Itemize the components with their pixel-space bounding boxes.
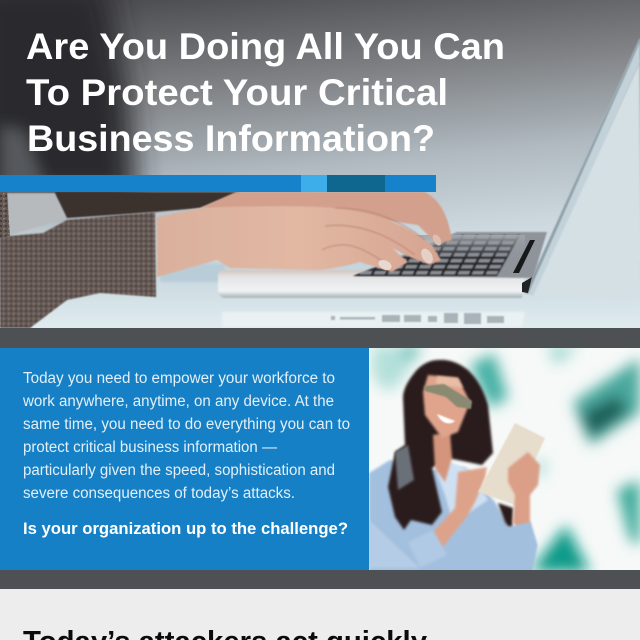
arm and hand [433,467,487,548]
dark divider band top [0,328,640,348]
hair [388,360,493,530]
jacket sleeve [0,212,156,328]
intro paragraph: Today you need to empower your workforce to [23,370,335,387]
blue accent bar [0,175,436,192]
title: To Protect Your Critical [26,72,448,113]
lower hair right [498,503,513,532]
finger creases [322,208,425,268]
intro paragraph [22,370,350,502]
main hand [157,206,441,277]
upper hand [200,192,452,244]
intro paragraph: particularly given the speed, sophistication and [23,462,335,479]
laptop base [218,270,526,298]
shirt [369,460,537,572]
title: Are You Doing All You Can [26,26,505,67]
right hand [508,452,540,535]
intro paragraph: protect critical business information — [23,439,278,456]
hero photo: hands typing on laptop [0,0,640,328]
title [26,26,505,159]
panel: intro text [0,348,369,570]
tablet [478,423,545,505]
face [423,375,470,438]
intro paragraph: severe consequences of today’s attacks. [23,485,295,502]
intro paragraph: work anywhere, anytime, on any device. At the [22,393,334,410]
shirt cuff [410,530,446,566]
neck [433,432,452,482]
photo: woman using tablet [369,346,640,572]
panel: next section [0,589,640,640]
title: Business Information? [27,118,435,159]
intro question: Is your organization up to the challenge? [23,519,348,538]
glasses [424,384,472,409]
right sleeve cuff [506,521,538,570]
intro paragraph: same time, you need to do everything you can to [23,416,350,433]
laptop deck [353,232,547,278]
dark divider band bottom [0,570,640,589]
